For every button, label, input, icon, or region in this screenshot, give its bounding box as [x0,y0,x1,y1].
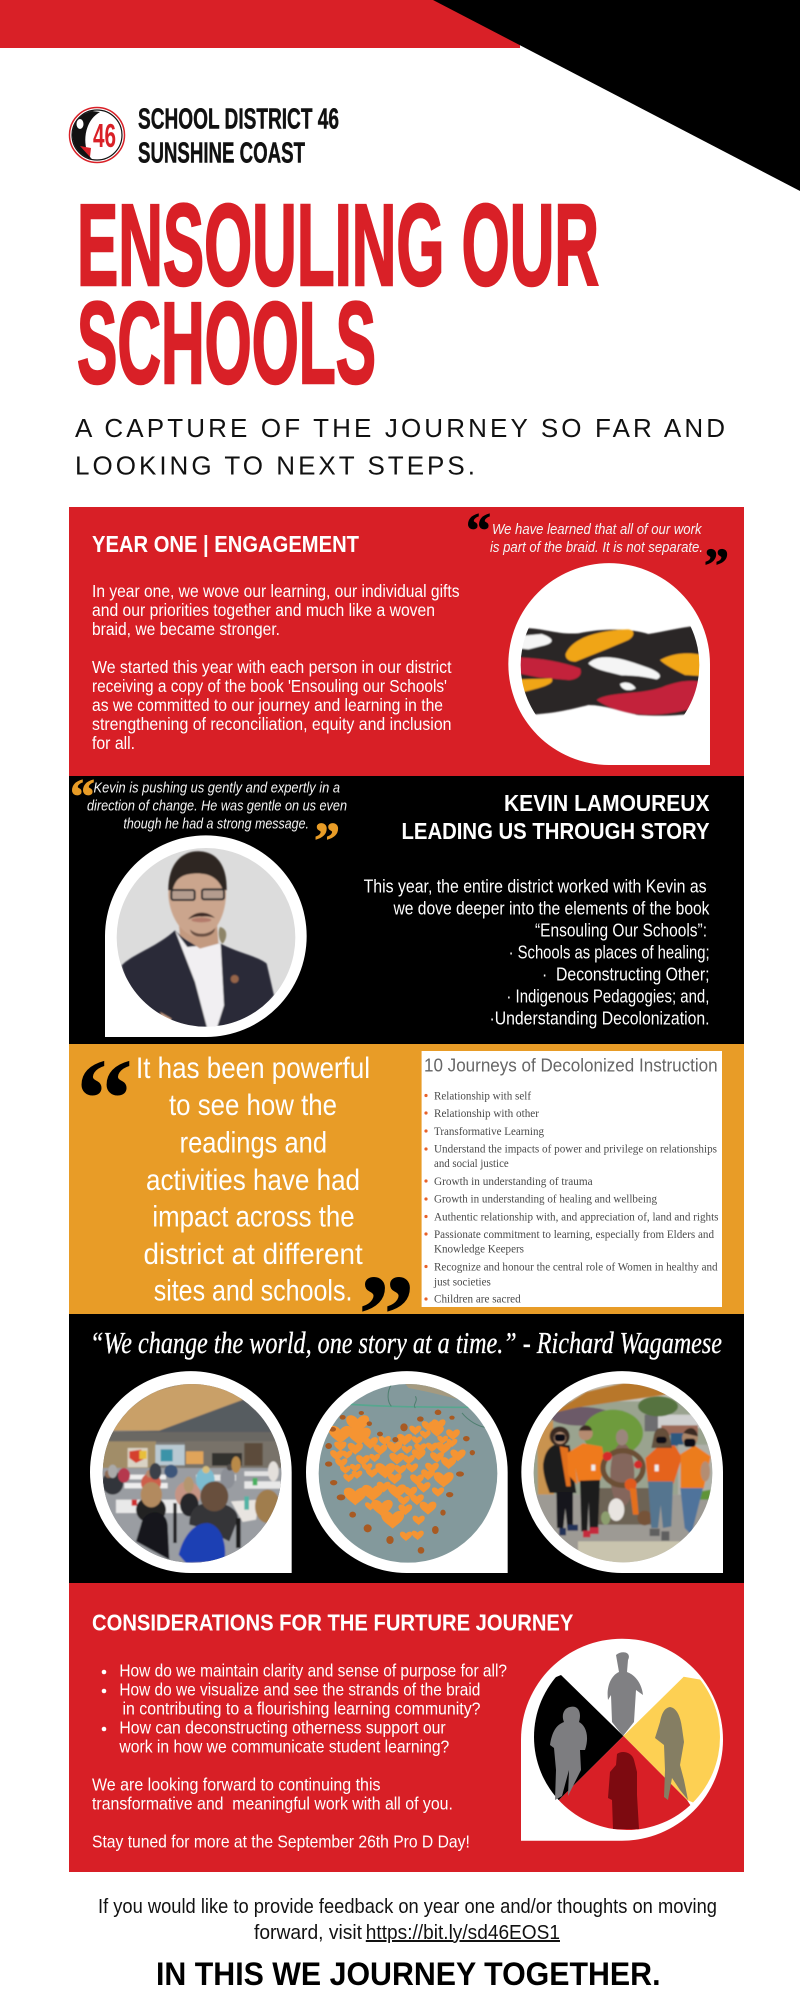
card bullet list: Knowledge Keepers [434,1242,524,1256]
pull quote: braid [466,502,729,593]
logo wordmark [138,104,339,170]
silhouette: right figure [655,1707,688,1800]
large quote text [76,1035,415,1378]
footer feedback text [98,1896,717,1944]
photo: Kevin Lamoureux portrait [105,835,307,1037]
large quote text: impact across the [152,1201,355,1234]
body text: Kevin: · Indigenous Pedagogies; and, [506,986,709,1007]
body text: year one: We started this year with each person in our district [92,657,452,677]
icon: medicine wheel with silhouettes [521,1638,723,1841]
closing line: IN THIS WE JOURNEY TOGETHER. [156,1956,660,1992]
heading: considerations: CONSIDERATIONS FOR THE FURTURE JOURNEY [92,1610,574,1636]
pull quote: Kevin: “ [70,768,95,824]
title: SCHOOLS [77,278,376,408]
large quote text: “ [76,1035,133,1162]
body text: Kevin: · Deconstructing Other; [542,964,710,985]
icon: district crest: 46 [93,117,116,154]
silhouette: top figure [608,1652,643,1736]
panel background black [69,1314,744,1583]
subtitle: A CAPTURE OF THE JOURNEY SO FAR AND [75,413,725,443]
subtitle [75,413,725,480]
body text: year one: for all. [92,733,135,753]
footer feedback text: If you would like to provide feedback on year one and/or thoughts on moving [98,1896,717,1918]
panel: Kevin Lamoureux [69,768,744,1044]
closing text: We are looking forward to continuing this [92,1775,381,1795]
body text: Kevin: “Ensouling Our Schools”: [535,920,707,941]
photo: orange paper hearts [306,1371,508,1573]
body text: year one: receiving a copy of the book 'Ensouling our Schools' [92,676,447,696]
large quote text: sites and schools. [154,1275,352,1308]
closing text: transformative and meaningful work with all of you. [92,1794,453,1814]
silhouette: left figure [550,1707,587,1800]
closing text: Stay tuned for more at the September 26th Pro D Day! [92,1832,470,1852]
card: 10 Journeys of Decolonized Instruction [422,1051,722,1307]
panel: powerful quote and 10 journeys [69,1035,744,1378]
card bullet list: Recognize and honour the central role of Women in healthy and [434,1259,718,1273]
top red banner [0,0,520,48]
title [77,180,599,408]
card bullet list: and social justice [434,1156,509,1170]
pull quote: Kevin: though he had a strong message. [123,817,309,833]
icon: district crest [70,108,124,162]
panel background orange [69,1044,744,1314]
body text: Kevin: ·Understanding Decolonization. [490,1008,710,1029]
bullet questions: How do we maintain clarity and sense of purpose for all? [119,1661,507,1681]
top black corner triangle [433,0,800,191]
bullet questions [102,1661,507,1757]
panel background red [69,507,744,776]
card bullet list: Authentic relationship with, and appreciation of, land and rights [434,1209,719,1223]
footer feedback text: forward, visit [254,1922,362,1944]
card bullet list: Transformative Learning [434,1124,544,1138]
image: woven braid [508,563,710,765]
pull quote: Kevin: Kevin is pushing us gently and expertly in a [94,781,340,797]
photo: staff in orange shirts with eagle statue [521,1371,723,1573]
panel: considerations for the future journey [69,1583,760,1872]
pull quote: braid: We have learned that all of our work [492,522,702,538]
bullet questions: work in how we communicate student learning? [119,1737,450,1757]
body text: year one: as we committed to our journey and learning in the [92,695,443,715]
closing text [92,1775,470,1852]
body text: Kevin: we dove deeper into the elements of the book [393,898,710,919]
body text: year one [92,581,460,753]
heading: Kevin Lamoureux: LEADING US THROUGH STORY [402,818,710,844]
pull quote: Kevin: ” [314,813,340,870]
body text: year one: braid, we became stronger. [92,619,280,639]
footer feedback text: https://bit.ly/sd46EOS1 [366,1922,560,1944]
panel background red [69,1583,744,1872]
pull quote: Kevin [70,768,347,870]
card bullet list: Passionate commitment to learning, especially from Elders and [434,1227,714,1241]
subtitle: LOOKING TO NEXT STEPS. [75,450,475,480]
body text: Kevin: · Schools as places of healing; [509,942,710,963]
heading: year one: YEAR ONE | ENGAGEMENT [92,531,360,557]
large quote text: ” [358,1251,415,1378]
large quote text: to see how the [169,1089,337,1122]
bullet questions: How do we visualize and see the strands of the braid [119,1680,480,1700]
large quote text: It has been powerful [136,1052,370,1085]
logo wordmark: SCHOOL DISTRICT 46 [138,104,339,136]
body text: year one: and our priorities together and much like a woven [92,600,435,620]
card bullet list: just societies [433,1274,491,1288]
body text: year one: In year one, we wove our learning, our individual gifts [92,581,460,601]
body text: year one: strengthening of reconciliation, equity and inclusion [92,714,452,734]
bullet questions: How can deconstructing otherness support our [119,1718,446,1738]
heading: Kevin Lamoureux: KEVIN LAMOUREUX [504,790,710,816]
large quote text: district at different [144,1238,363,1271]
panel: story quote and photos [69,1314,744,1583]
card bullet list [424,1088,719,1306]
silhouette: bottom figure [608,1752,639,1829]
large quote text: readings and [180,1127,327,1160]
card title: 10 Journeys of Decolonized Instruction [424,1055,718,1076]
heading: Kevin Lamoureux [402,790,710,844]
pull quote: braid: ” [704,537,729,593]
bullet questions: in contributing to a flourishing learning community? [122,1699,481,1719]
card bullet list: Understand the impacts of power and privilege on relationships [434,1142,717,1156]
large quote text: activities have had [146,1164,360,1197]
card bullet list: Relationship with self [434,1088,531,1102]
pull quote: braid: “ [466,502,491,558]
body text: Kevin: This year, the entire district worked with Kevin as [364,876,707,897]
photo: classroom gathering [90,1371,292,1573]
card bullet list: Children are sacred [434,1292,521,1306]
logo: School District 46 [70,104,339,170]
panel background black [69,776,744,1044]
card bullet list: Relationship with other [434,1106,539,1120]
pull quote: Kevin: direction of change. He was gentle on us even [87,799,347,815]
body text: Kevin [364,876,710,1029]
card bullet list: Growth in understanding of trauma [434,1174,593,1188]
pull quote: braid: is part of the braid. It is not separate. [490,540,703,556]
logo wordmark: SUNSHINE COAST [138,138,305,170]
card bullet list: Growth in understanding of healing and wellbeing [434,1192,657,1206]
panel: year one engagement [69,502,744,776]
